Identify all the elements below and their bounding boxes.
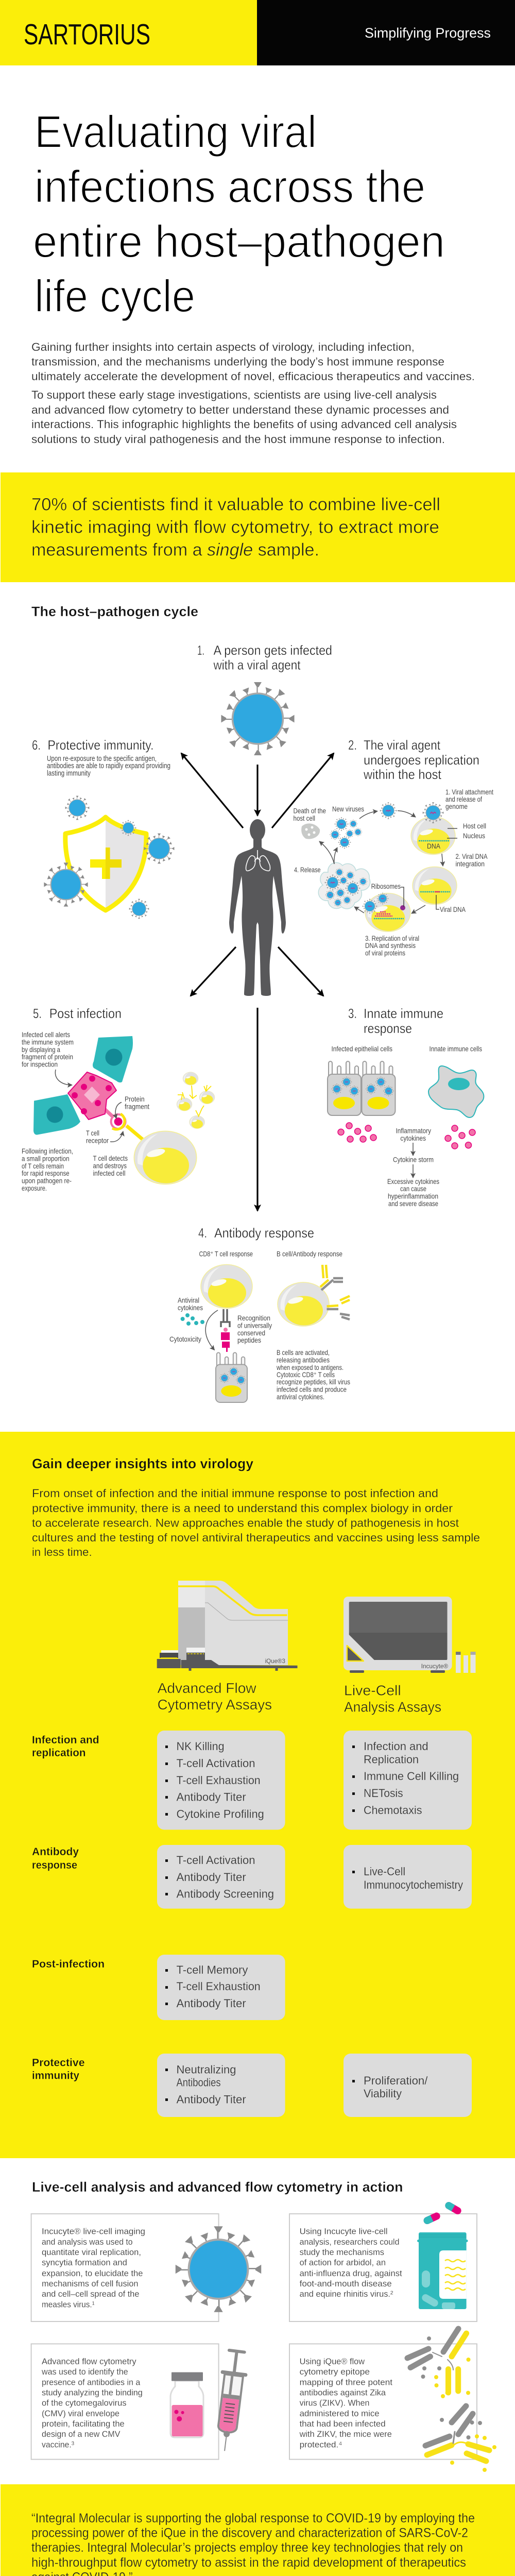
intro text block [31,341,475,446]
intro text block: interactions. This infographic highlights the benefits of using advanced cell analysis [31,418,457,431]
row: antibody response: Antibody [32,1846,79,1858]
row: protective immunity: Proliferation/ [364,2074,428,2087]
card 1: measles virus: syncytia formation and [42,2258,127,2267]
diagram: B cell with antibodies [278,1265,350,1326]
icon: syringe [211,2348,250,2452]
cytokine storm flow: Cytokine storm [393,1155,434,1163]
card 1: measles virus: mechanisms of cell fusion [42,2279,138,2289]
row: post-infection [32,1955,285,2020]
card 3: cytomegalovirus: presence of antibodies in a [42,2377,141,2387]
text block: virology intro: in less time. [32,1546,92,1558]
post infection notes: by displaying a [22,1045,60,1054]
row: infection and replication: T-cell Activation [176,1757,255,1770]
row: antibody response: response [32,1859,77,1871]
quote: Integral Molecular: processing power of the iQue in the discovery and characterization of SARS-CoV-2 [31,2526,468,2540]
row: antibody response: Antibody Screening [176,1888,274,1900]
cycle labels: Ribosomes [371,882,401,890]
row: infection and replication: Infection and [364,1740,428,1753]
card 3: cytomegalovirus [31,2344,250,2460]
panel: gain deeper insights [0,1432,515,2158]
row: antibody response: Antibody Titer [176,1871,246,1884]
step 2: viral replication: The viral agent [364,737,441,753]
callout: 70% of scientists: measurements from a single sample. [31,540,319,560]
card 4: Zika virus: protected.⁴ [300,2440,342,2450]
row: antibody response [32,1845,472,1909]
tagline: Simplifying Progress [365,25,491,41]
card 4: Zika virus: with ZIKV, the mice were [299,2429,392,2439]
row: protective immunity: Neutralizing [176,2063,236,2076]
row: infection and replication: Chemotaxis [364,1804,422,1817]
text block: virology intro: From onset of infection and the initial immune response to post infection and [32,1487,438,1500]
quote: Integral Molecular: “Integral Molecular is supporting the global response to COVID-19 by employing the [31,2511,475,2526]
step 1: a person gets infected: with a viral agent [213,657,301,673]
card 1: measles virus: measles virus.¹ [42,2300,95,2309]
cycle labels: DNA [427,842,441,850]
quote: Integral Molecular: high-throughput flow cytometry to assist in the rapid development of therapeutics [31,2555,466,2570]
card 3: cytomegalovirus: study analyzing the binding [42,2387,143,2397]
cytokine storm flow: and severe disease [388,1199,438,1208]
title [33,106,445,321]
step 4: antibody response: Antibody response [214,1225,314,1241]
step 1: a person gets infected: 1. [197,642,204,658]
step 6: protective immunity: lasting immunity [47,769,91,778]
quote: Integral Molecular [31,2511,475,2576]
row: protective immunity [32,2054,472,2117]
intro text block: transmission, and the mechanisms underlying the body’s host immune response [31,355,444,368]
row: protective immunity: Antibody Titer [176,2093,246,2106]
heading: the host-pathogen cycle: The host–pathogen cycle [31,604,198,619]
antibody response labels: Antiviral [178,1296,199,1304]
icon: shield with cross and viruses [44,796,174,919]
post infection notes: Infected cell alerts [22,1030,70,1039]
antibody response labels: Cytotoxic CD8⁺ T cells [277,1370,335,1379]
callout: 70% of scientists [1,472,515,582]
antibody response labels [169,1296,350,1401]
step 2: viral replication: 2. [348,737,357,753]
card 3: cytomegalovirus: (CMV) viral envelope [42,2409,119,2418]
intro text block: and advanced flow cytometry to better understand these dynamic processes and [31,403,449,416]
row: protective immunity: Viability [364,2087,402,2100]
step 3: innate immune response: Infected epithelial cells [332,1045,392,1053]
column heading: live-cell analysis assays [344,1683,441,1715]
step 6: protective immunity: Upon re-exposure to the specific antigen, [47,754,157,763]
cycle labels: Host cell [463,822,486,830]
card 3: cytomegalovirus: protein, facilitating the [42,2419,125,2429]
step 4: antibody response: B cell/Antibody response [277,1250,342,1258]
diagram: T cell detecting infected cell [33,1036,215,1184]
card 2: arbidol: of action for arbidol, an [300,2258,386,2267]
antibody response labels: Recognition [237,1314,270,1322]
text block: virology intro: to accelerate research. New approaches enable the study of pathogenesis in host [32,1517,459,1529]
card 2: arbidol: Using Incucyte live-cell [300,2227,388,2236]
card 1: measles virus: and cell–cell spread of the [42,2289,139,2299]
column heading: advanced flow cytometry assays: Cytometry Assays [158,1697,272,1713]
step 6: protective immunity: Protective immunity. [47,737,153,753]
diagram: innate immune cell [428,1066,484,1117]
row: protective immunity: immunity [32,2070,79,2081]
cycle labels: 2. Viral DNA [455,852,488,860]
heading: in action: Live-cell analysis and advanced flow cytometry in action [32,2179,403,2195]
post infection notes: T cell [86,1129,99,1137]
logo: Sartorius: SARTORIUS [24,18,150,51]
row: protective immunity: Protective [32,2057,84,2069]
column heading: live-cell analysis assays: Live-Cell [344,1683,401,1699]
step 6: protective immunity: antibodies are able to rapidly expand providing [47,761,170,770]
antibody response labels: peptides [237,1336,261,1344]
cycle labels: Death of the [294,807,326,815]
cytokine storm flow: Inflammatory [396,1127,431,1135]
card 3: cytomegalovirus: of the cytomegalovirus [42,2398,127,2408]
row: antibody response: T-cell Activation [176,1854,255,1867]
intro text block: solutions to study viral pathogenesis and the host immune response to infection. [31,433,445,446]
row: infection and replication: T-cell Exhaustion [176,1774,261,1787]
post infection notes: fragment [125,1103,149,1111]
cycle labels [294,788,493,957]
title: Evaluating viral [35,106,317,157]
post infection notes: for inspection [22,1060,58,1069]
step 1: a person gets infected [197,642,332,755]
cytokine storm flow: Excessive cytokines [387,1177,439,1185]
row: infection and replication: replication [32,1747,85,1759]
icon: antibodies and particles [407,2329,496,2472]
card 3: cytomegalovirus: design of a new CMV [42,2429,121,2439]
cycle labels: genome [445,802,468,810]
icon: virus [176,2227,261,2311]
card 2: arbidol: analysis, researchers could [300,2237,400,2247]
card 4: Zika virus: virus (ZIKV). When [300,2398,370,2408]
card 4: Zika virus: that had been infected [300,2419,386,2429]
post infection notes: for rapid response [22,1169,70,1177]
card 3: cytomegalovirus: vaccine.³ [42,2440,74,2450]
diagram: CD8 T cell and infected cell [181,1264,252,1402]
column heading: advanced flow cytometry assays: Advanced Flow [158,1680,256,1696]
cycle labels: DNA and synthesis [365,941,416,950]
row: infection and replication: Cytokine Profiling [176,1807,264,1821]
cytokine storm flow [387,1127,439,1208]
post infection notes: of T cells remain [22,1162,64,1170]
post infection notes: exposure. [22,1184,47,1192]
card 3: cytomegalovirus: Advanced flow cytometry [42,2357,136,2366]
post infection notes: infected cell [93,1169,126,1177]
antibody response labels: when exposed to antigens. [276,1363,344,1371]
step 5: post infection [22,1006,215,1192]
post infection notes: and destroys [93,1161,127,1170]
step 6: protective immunity [32,737,174,919]
cycle labels: Nucleus [463,832,485,840]
step 2: viral replication: undergoes replication [364,752,479,768]
row: infection and replication: Infection and [32,1734,99,1746]
row: antibody response: Live-Cell [364,1865,405,1878]
card 1: measles virus: Incucyte® live-cell imaging [42,2227,145,2236]
post infection notes [22,1030,149,1192]
quote: Integral Molecular: therapies. Integral Molecular’s projects employ three key technologies that rely on [31,2540,463,2555]
card 2: arbidol: anti-influenza drug, against [300,2268,402,2278]
intro text block: Gaining further insights into certain aspects of virology, including infection, [31,341,415,353]
post infection notes: T cell detects [93,1154,128,1162]
post infection notes: a small proportion [22,1155,70,1163]
title: life cycle [35,270,195,321]
card 1: measles virus: expansion, to elucidate the [42,2268,143,2278]
row: protective immunity: Antibodies [176,2076,221,2089]
icon: Incucyte instrument [344,1597,476,1673]
step 3: innate immune response: response [364,1021,412,1036]
antibody response labels: B cells are activated, [277,1348,330,1357]
antibody response labels: Cytotoxicity [169,1335,201,1343]
text block: virology intro [32,1487,480,1558]
antibody response labels: cytokines [178,1303,203,1312]
cycle labels: and release of [445,795,482,803]
card 2: arbidol [289,2200,477,2321]
card 4: Zika virus: administered to mice [300,2409,380,2418]
card 2: arbidol: and equine rhinitis virus.² [300,2289,393,2299]
antibody response labels: antiviral cytokines. [277,1393,324,1401]
row: infection and replication: Replication [364,1753,419,1766]
icon: human figure with lungs [229,819,286,996]
cytokine storm flow: hyperinflammation [388,1192,438,1200]
cytokine storm flow: cytokines [400,1134,426,1142]
antibody response labels: of universally [237,1321,272,1329]
cycle labels: host cell [294,814,315,822]
antibody response labels: recognize peptides, kill virus [277,1378,350,1386]
card 1: measles virus [31,2214,261,2321]
post infection notes: the immune system [22,1038,74,1046]
post infection notes: Following infection, [22,1147,73,1155]
cycle labels: Viral DNA [440,905,466,913]
cycle labels: 3. Replication of viral [365,934,419,942]
post infection notes: receptor [86,1137,109,1145]
cycle labels: of viral proteins [365,949,405,957]
card 1: measles virus: and analysis was used to [42,2237,133,2247]
card 4: Zika virus [289,2329,496,2472]
row: infection and replication: NETosis [364,1787,403,1800]
row: post-infection: T-cell Memory [176,1963,248,1976]
icon: Incucyte instrument: Incucyte® [421,1663,448,1670]
card 2: arbidol: foot-and-mouth disease [300,2279,392,2289]
card 4: Zika virus: Using iQue® flow [300,2357,365,2366]
heading: gain deeper insights: Gain deeper insights into virology [32,1456,253,1471]
card 4: Zika virus: cytometry epitope [300,2367,370,2377]
post infection notes: fragment of protein [22,1053,73,1061]
cytokine storm flow: can cause [400,1184,426,1193]
callout: 70% of scientists: kinetic imaging with flow cytometry, to extract more [31,517,439,537]
icon: iQue 3 instrument: iQue®3 [265,1657,285,1665]
step 6: protective immunity: 6. [32,737,41,753]
row: infection and replication [32,1731,472,1830]
text block: virology intro: protective immunity, there is a need to understand this complex biology in order [32,1502,453,1515]
step 5: post infection: 5. [33,1006,42,1021]
row: infection and replication: NK Killing [176,1740,225,1753]
header: logo and tagline bar [0,0,515,65]
diagram: infected epithelial cells [328,1061,396,1115]
step 1: a person gets infected: A person gets infected [213,642,332,658]
text block: virology intro: cultures and the testing of novel antiviral therapeutics and vaccines using less sample [32,1531,480,1544]
cycle labels: 4. Release [294,866,321,874]
icon: pill bottle and capsules [417,2200,468,2309]
arrows around the person [181,753,334,1211]
antibody response labels: infected cells and produce [277,1385,347,1393]
cycle labels: integration [455,860,485,868]
cycle labels: 1. Viral attachment [445,788,493,796]
title: entire host–pathogen [33,216,445,267]
cycle labels: New viruses [332,805,364,813]
card 1: measles virus: quantitate viral replication, [42,2247,141,2257]
chart: viral replication cycle [294,788,493,957]
callout: 70% of scientists: 70% of scientists find it valuable to combine live-cell [31,495,440,514]
icon: vial [170,2372,203,2437]
panel: quotes [1,2484,515,2576]
step 2: viral replication [294,737,493,957]
step 3: innate immune response [328,1006,484,1208]
inflammatory cytokine dots [338,1123,475,1149]
post infection notes: upon pathogen re- [22,1177,72,1185]
step 3: innate immune response: 3. [348,1006,357,1021]
intro text block: To support these early stage investigations, scientists are using live-cell analysis [31,388,437,401]
column heading: advanced flow cytometry assays [158,1680,272,1713]
step 4: antibody response: 4. [198,1225,207,1241]
row: post-infection: T-cell Exhaustion [176,1980,261,1993]
antibody response labels: conserved [237,1329,265,1337]
icon: iQue 3 instrument [157,1581,298,1671]
step 5: post infection: Post infection [49,1006,122,1021]
row: infection and replication: Immune Cell Killing [364,1770,459,1783]
step 4: antibody response [169,1225,350,1402]
step 2: viral replication: within the host [363,767,442,782]
card 4: Zika virus: antibodies against Zika [300,2387,386,2397]
step 3: innate immune response: Innate immune cells [430,1045,482,1053]
icon: large virus [221,683,294,755]
row: infection and replication: Antibody Titer [176,1790,246,1803]
card 3: cytomegalovirus: was used to identify the [41,2367,128,2377]
step 3: innate immune response: Innate immune [364,1006,443,1021]
antibody response labels: releasing antibodies [277,1356,330,1364]
row: post-infection: Antibody Titer [176,1997,246,2010]
intro text block: ultimately accelerate the development of novel, efficacious therapeutics and vaccines. [31,370,475,383]
row: antibody response: Immunocytochemistry [364,1878,463,1891]
step 4: antibody response: CD8⁺ T cell response [199,1250,253,1258]
card 2: arbidol: study the mechanisms [300,2247,384,2257]
row: post-infection: Post-infection [32,1958,105,1970]
card 4: Zika virus: mapping of three potent [300,2377,392,2387]
post infection notes: Protein [125,1095,145,1103]
title: infections across the [35,161,425,212]
column heading: live-cell analysis assays: Analysis Assays [344,1699,441,1715]
